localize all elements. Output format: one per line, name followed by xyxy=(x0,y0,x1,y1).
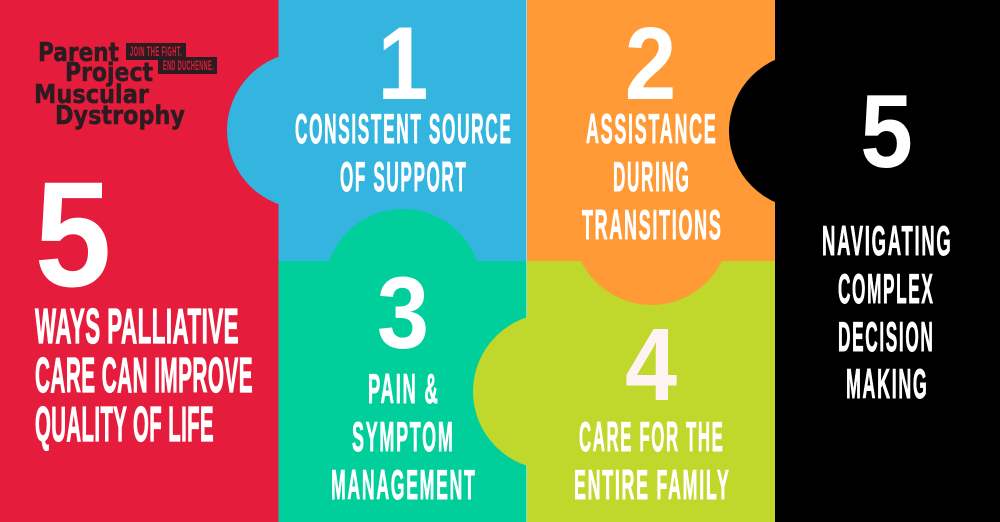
text: MANAGEMENT xyxy=(331,461,476,508)
logo: Parent Project Muscular Dystrophy: Muscular xyxy=(34,80,149,110)
panel: black step 5 xyxy=(775,0,1000,522)
text: CARE CAN IMPROVE xyxy=(35,349,253,403)
step 4 number: 4 xyxy=(625,307,677,422)
step 4 label xyxy=(574,413,730,508)
text: CARE FOR THE xyxy=(579,413,724,460)
step 2 label xyxy=(582,105,722,248)
panel: blue step 1 xyxy=(227,0,526,261)
heading: ways palliative care can improve quality of life: QUALITY OF LIFE xyxy=(35,398,214,452)
text: ENTIRE FAMILY xyxy=(574,461,730,508)
step 3 label: PAIN & xyxy=(368,365,440,412)
logo: Parent Project Muscular Dystrophy: JOIN THE FIGHT. xyxy=(130,44,182,59)
step 3 number: 3 xyxy=(377,255,429,370)
heading number: 5: 5 xyxy=(35,151,111,318)
panel: green step 3 xyxy=(278,209,526,522)
panel: lime step 4 xyxy=(527,261,775,522)
step 1 label xyxy=(295,105,512,200)
heading: ways palliative care can improve quality of life xyxy=(35,300,253,452)
puzzle tab: lime xyxy=(473,314,629,470)
step 2 label: DURING xyxy=(613,153,690,200)
text: ASSISTANCE xyxy=(586,105,718,152)
panel: orange step 2 xyxy=(527,0,775,305)
logo: Parent Project Muscular Dystrophy: Project xyxy=(65,58,153,88)
text: WAYS PALLIATIVE xyxy=(35,300,239,354)
step 2 number: 2 xyxy=(625,5,676,121)
logo: Parent Project Muscular Dystrophy: Dystrophy xyxy=(55,101,185,131)
text: END DUCHENNE. xyxy=(163,58,214,73)
panel: red title xyxy=(0,0,279,522)
step 3 label: SYMPTOM xyxy=(352,413,454,460)
logo: Parent Project Muscular Dystrophy xyxy=(34,38,217,131)
step 5 number: 5 xyxy=(860,74,913,190)
logo: Parent Project Muscular Dystrophy: Parent xyxy=(38,38,119,68)
step 3 label xyxy=(331,365,476,508)
step 1 number: 1 xyxy=(378,5,428,121)
text: CONSISTENT SOURCE xyxy=(295,105,512,152)
text: TRANSITIONS xyxy=(582,201,722,248)
step 5 label xyxy=(822,217,952,407)
step 1 label: OF SUPPORT xyxy=(340,153,468,200)
puzzle tab: black xyxy=(729,53,885,209)
